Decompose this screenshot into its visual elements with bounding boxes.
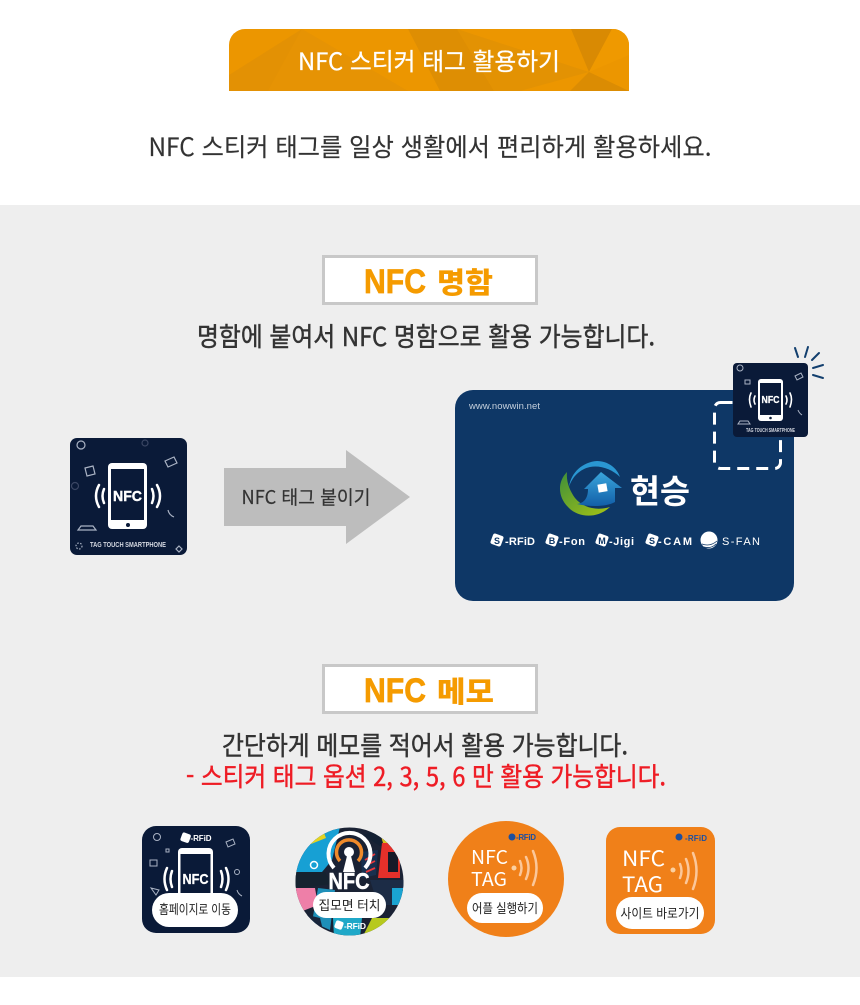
- memo sticker 2: NFC: [328, 868, 370, 894]
- heading: NFC 명함: [324, 256, 536, 304]
- NFC sticker on card: [733, 363, 808, 437]
- sparkle lines: [795, 347, 823, 378]
- memo sticker 3: 어플 실행하기: [472, 898, 538, 917]
- memo sticker 4: -RFiD: [685, 834, 707, 843]
- business card: [455, 390, 794, 601]
- memo sticker 1: 홈페이지로 이동: [159, 899, 231, 918]
- NFC sticker large: [70, 438, 187, 555]
- memo sticker 2: -RFiD: [344, 921, 366, 931]
- memo sticker 3: TAG: [471, 865, 507, 892]
- memo sticker 3: -RFiD: [516, 833, 536, 842]
- company logo: 현승: [630, 465, 690, 513]
- memo sticker 1: NFC: [182, 871, 209, 888]
- arrow: [224, 450, 410, 544]
- memo sticker 1: [142, 826, 250, 933]
- product logos: [490, 532, 760, 548]
- memo sticker 4: TAG: [622, 869, 663, 899]
- subheading: memo: 간단하게 메모를 적어서 활용 가능합니다.: [222, 726, 628, 763]
- title banner: [229, 29, 629, 91]
- memo sticker 1: -RFiD: [190, 834, 212, 843]
- memo sticker 4: 사이트 바로가기: [620, 903, 700, 922]
- product logos: -CAM: [658, 536, 692, 548]
- title banner: NFC 스티커 태그 활용하기: [298, 42, 560, 77]
- product logos: M: [598, 536, 606, 546]
- product logos: -RFiD: [505, 536, 535, 548]
- NFC sticker on card: NFC: [762, 395, 780, 406]
- NFC sticker on card: TAG TOUCH SMARTPHONE: [746, 428, 795, 434]
- product logos: S-FAN: [722, 536, 760, 548]
- heading: NFC 명함: 명함: [437, 260, 493, 302]
- heading: NFC 메모: 메모: [437, 669, 494, 711]
- NFC sticker large: NFC: [113, 488, 142, 505]
- product logos: -Jigi: [609, 536, 634, 548]
- heading: NFC 명함: NFC: [364, 263, 426, 301]
- product logos: S: [649, 536, 655, 546]
- product logos: B: [549, 536, 556, 546]
- memo sticker 2: 집모면 터치: [318, 895, 380, 914]
- heading: NFC 메모: [324, 666, 536, 712]
- company logo: [560, 461, 690, 516]
- subheading: business card: 명함에 붙여서 NFC 명함으로 활용 가능합니다.: [197, 317, 655, 354]
- product logos: -Fon: [559, 536, 585, 548]
- memo sticker 4: NFC: [622, 843, 665, 873]
- NFC sticker large: TAG TOUCH SMARTPHONE: [90, 542, 166, 549]
- heading: NFC 메모: NFC: [364, 672, 426, 710]
- memo sticker 3: NFC: [471, 843, 508, 870]
- product logos: S: [494, 536, 500, 546]
- memo sticker 2: [295, 826, 405, 938]
- memo sticker 4: [606, 827, 715, 934]
- arrow: NFC 태그 붙이기: [242, 483, 370, 510]
- intro text: NFC 스티커 태그를 일상 생활에서 편리하게 활용하세요.: [148, 128, 712, 164]
- memo sticker 3: [448, 821, 564, 937]
- note: options: - 스티커 태그 옵션 2, 3, 5, 6 만 활용 가능합니다.: [186, 757, 666, 794]
- business card: www.nowwin.net: [468, 401, 540, 412]
- dashed placement box: [714, 402, 780, 468]
